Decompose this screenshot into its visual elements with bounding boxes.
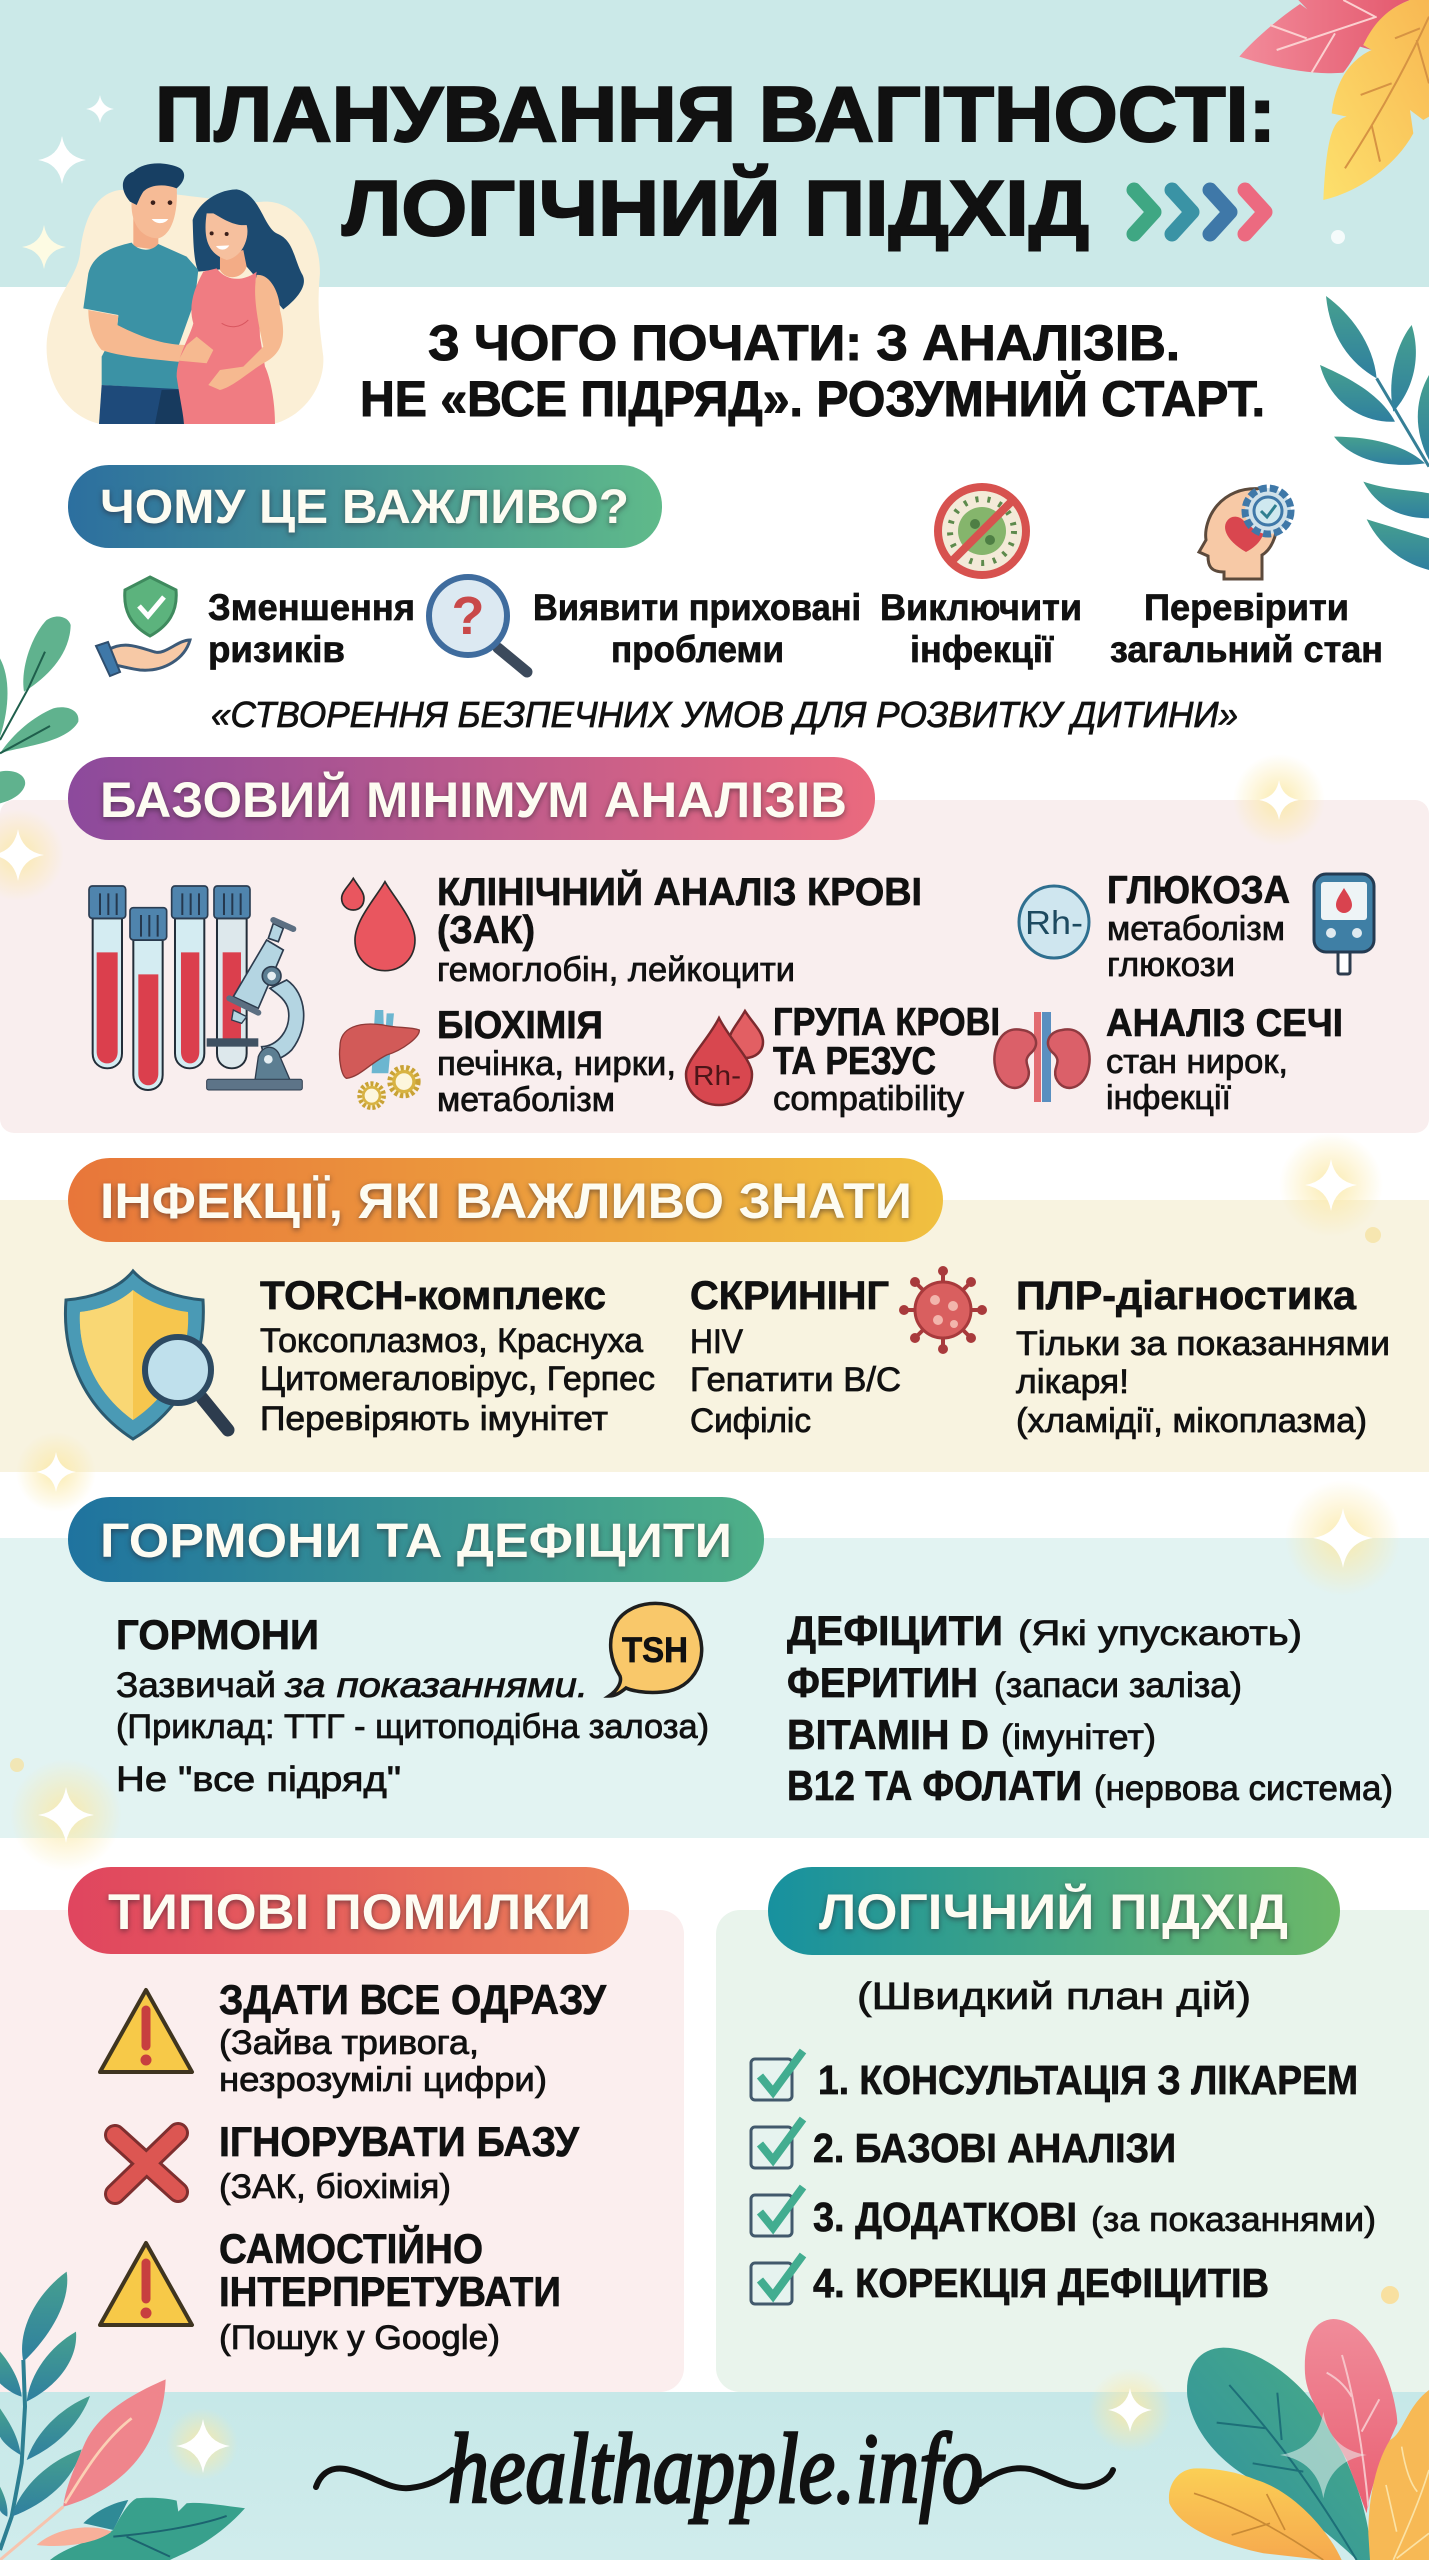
checklist item 3: [751, 2187, 1376, 2240]
text: complete blood count: гемоглобін, лейкоцити: [437, 951, 795, 989]
text: hormones: Зазвичай: [116, 1666, 276, 1705]
icon: Rh blood drops: Rh-: [693, 1060, 741, 1091]
text: PCR diagnostics: ПЛР-діагностика: [1016, 1274, 1357, 1318]
heading pill: basic tests: БАЗОВИЙ МІНІМУМ АНАЛІЗІВ: [100, 771, 847, 828]
heading pill: hormones and deficits: ГОРМОНИ ТА ДЕФІЦИТИ: [100, 1515, 732, 1568]
text: screening: [690, 1274, 901, 1440]
title: ПЛАНУВАННЯ ВАГІТНОСТІ:: [155, 70, 1276, 158]
text: screening: Гепатити В/С: [690, 1361, 901, 1399]
text: hormones: (Приклад: ТТГ - щитоподібна залоза): [116, 1708, 709, 1746]
footer logo: healthapple.info: healthapple.info: [448, 2413, 983, 2524]
heading pill: hormones and deficits: [68, 1497, 764, 1582]
icon: blood drops: [342, 878, 415, 971]
panel: top header band: [0, 0, 1429, 287]
decoration: bottom right leaves: [1169, 2319, 1429, 2560]
decoration: left green leaves: [0, 616, 78, 803]
icon: shield over hand: [96, 577, 190, 676]
text: exclude infections: Виключити: [880, 587, 1082, 628]
text: hormones: ГОРМОНИ: [116, 1611, 319, 1658]
icon: warning triangle 1: [100, 1990, 192, 2072]
panel: logical approach background: [716, 1910, 1429, 2392]
text: PCR diagnostics: Тільки за показаннями: [1016, 1325, 1390, 1363]
text: deficits: (Які упускають): [1018, 1614, 1302, 1653]
heading pill: infections: ІНФЕКЦІЇ, ЯКІ ВАЖЛИВО ЗНАТИ: [100, 1173, 912, 1229]
text: test everything at once: ЗДАТИ ВСЕ ОДРАЗУ: [219, 1976, 607, 2023]
text: test everything at once: (Зайва тривога,: [219, 2024, 479, 2062]
icon: magnifier with question mark: ?: [452, 586, 484, 646]
heading pill: why it matters: [68, 465, 662, 548]
text: reveal hidden problems: проблеми: [611, 629, 784, 670]
text: complete blood count: КЛІНІЧНИЙ АНАЛІЗ КРОВІ: [437, 869, 922, 914]
text: check overall state: загальний стан: [1110, 629, 1383, 670]
icon: crossed out virus: [938, 487, 1026, 575]
text: biochemistry: метаболізм: [437, 1081, 615, 1119]
section: common mistakes: [68, 1867, 629, 2357]
icon: shield with magnifier: [65, 1271, 228, 1439]
icon: Rh badge: [1019, 886, 1089, 958]
text: TORCH complex: TORCH-комплекс: [260, 1274, 606, 1318]
checklist item 3: 3. ДОДАТКОВІ: [813, 2194, 1077, 2240]
text: test everything at once: [219, 1976, 607, 2099]
text: self interpretation: [219, 2224, 561, 2357]
decoration: bottom left leaves: [0, 2272, 245, 2560]
panel: infections background: [0, 1200, 1429, 1472]
text: blood group and Rh: ТА РЕЗУС: [773, 1040, 936, 1083]
icon: chevron arrows: [1134, 190, 1265, 234]
section: hormones and deficits: [68, 1497, 1393, 1809]
text: ignore the basics: [219, 2118, 580, 2206]
panel: footer band: [0, 2392, 1429, 2560]
text: check overall state: Перевірити: [1144, 587, 1349, 628]
heading pill: common mistakes: [68, 1867, 629, 1954]
text: biochemistry: БІОХІМІЯ: [437, 1004, 603, 1047]
icon: Rh badge: Rh-: [1025, 904, 1083, 941]
text: TORCH complex: [260, 1274, 655, 1438]
checklist item 2: 2. БАЗОВІ АНАЛІЗИ: [813, 2125, 1176, 2171]
text: complete blood count: [437, 869, 922, 989]
heading pill: basic tests: [68, 757, 875, 840]
text: hormones: Не "все підряд": [116, 1760, 401, 1799]
subtitle: З ЧОГО ПОЧАТИ: З АНАЛІЗІВ.: [428, 315, 1180, 371]
text: glucose: глюкози: [1107, 946, 1235, 984]
text: urine test: інфекції: [1106, 1079, 1232, 1117]
text: urine test: [1106, 1002, 1343, 1117]
text: reveal hidden problems: [533, 587, 861, 670]
illustration: test tubes and microscope: [89, 878, 419, 1108]
decoration: top right leaves: [1239, 0, 1429, 200]
icon: red cross: [115, 2133, 178, 2194]
text: check overall state: [1110, 587, 1383, 670]
text: self interpretation: САМОСТІЙНО: [219, 2224, 483, 2272]
section: logical approach: [751, 1867, 1376, 2306]
text: TORCH complex: Токсоплазмоз, Краснуха: [260, 1322, 643, 1360]
text: screening: HIV: [690, 1323, 743, 1361]
panel: hormones background: [0, 1538, 1429, 1838]
text: deficits: ВІТАМІН D: [787, 1711, 989, 1758]
text: hormones: [116, 1611, 709, 1799]
text: glucose: [1107, 869, 1290, 984]
text: glucose: ГЛЮКОЗА: [1107, 869, 1290, 912]
text: test everything at once: незрозумілі цифри): [219, 2061, 547, 2099]
panel: basic tests background: [0, 800, 1429, 1133]
icon: liver and gears: [340, 1010, 419, 1108]
text: blood group and Rh: [773, 1001, 1000, 1118]
panel: common mistakes background: [0, 1910, 684, 2392]
title: [155, 70, 1276, 252]
icon: kidneys: [994, 1012, 1090, 1102]
text: screening: Сифіліс: [690, 1402, 811, 1440]
text: deficits: (нервова система): [1094, 1769, 1393, 1808]
icon: Rh blood drops: [686, 1011, 763, 1105]
text: deficits: ДЕФІЦИТИ: [787, 1607, 1003, 1654]
icon: virus: [899, 1266, 987, 1354]
text: exclude infections: [880, 587, 1082, 670]
checklist item 3: (за показаннями): [1091, 2201, 1376, 2239]
text: urine test: стан нирок,: [1106, 1043, 1288, 1081]
subtitle: НЕ «ВСЕ ПІДРЯД». РОЗУМНИЙ СТАРТ.: [360, 370, 1265, 427]
heading pill: infections: [68, 1158, 943, 1242]
title: ЛОГІЧНИЙ ПІДХІД: [342, 164, 1089, 252]
subtitle: [360, 315, 1265, 427]
text: deficits: (запаси заліза): [994, 1666, 1242, 1705]
text: glucose: метаболізм: [1107, 910, 1285, 948]
icon: warning triangle 2: [100, 2243, 192, 2325]
checklist item 1: 1. КОНСУЛЬТАЦІЯ З ЛІКАРЕМ: [818, 2057, 1358, 2103]
text: screening: СКРИНІНГ: [690, 1274, 889, 1318]
checklist item 4: 4. КОРЕКЦІЯ ДЕФІЦИТІВ: [813, 2260, 1269, 2306]
text: ignore the basics: ІГНОРУВАТИ БАЗУ: [219, 2118, 580, 2165]
section: basic tests: [68, 757, 1374, 1119]
text: quick action plan: (Швидкий план дій): [857, 1976, 1251, 2018]
quote: «СТВОРЕННЯ БЕЗПЕЧНИХ УМОВ ДЛЯ РОЗВИТКУ ДИТИНИ»: [211, 694, 1238, 735]
text: blood group and Rh: ГРУПА КРОВІ: [773, 1001, 1000, 1044]
text: deficits: (імунітет): [1001, 1718, 1156, 1757]
text: urine test: АНАЛІЗ СЕЧІ: [1106, 1002, 1343, 1045]
text: self interpretation: (Пошук у Google): [219, 2319, 500, 2357]
illustration: couple: [47, 163, 323, 424]
text: PCR diagnostics: (хламідії, мікоплазма): [1016, 1402, 1367, 1440]
icon: magnifier with question mark: [429, 577, 527, 672]
text: reveal hidden problems: Виявити приховані: [533, 587, 861, 628]
icon: TSH speech bubble: TSH: [622, 1631, 688, 1670]
text: reduce risks: ризиків: [208, 629, 345, 670]
text: TORCH complex: Цитомегаловірус, Герпес: [260, 1360, 655, 1398]
heading pill: common mistakes: ТИПОВІ ПОМИЛКИ: [108, 1884, 591, 1940]
text: TORCH complex: Перевіряють імунітет: [260, 1400, 608, 1438]
text: hormones: за показаннями.: [284, 1666, 588, 1705]
section: why it matters: [68, 465, 1383, 735]
icon: head with heart and gear: [1199, 488, 1291, 579]
text: deficits: В12 ТА ФОЛАТИ: [787, 1762, 1082, 1809]
section: infections: [65, 1158, 1390, 1440]
text: reduce risks: Зменшення: [208, 587, 415, 628]
icon: TSH speech bubble: [609, 1603, 702, 1696]
text: self interpretation: ІНТЕРПРЕТУВАТИ: [219, 2268, 561, 2315]
text: biochemistry: [437, 1004, 676, 1119]
icon: glucometer: [1314, 874, 1374, 974]
text: PCR diagnostics: лікаря!: [1016, 1363, 1129, 1401]
heading pill: why it matters: ЧОМУ ЦЕ ВАЖЛИВО?: [100, 481, 629, 534]
text: PCR diagnostics: [1016, 1274, 1390, 1440]
text: exclude infections: інфекції: [910, 629, 1055, 670]
text: reduce risks: [208, 587, 415, 670]
heading pill: logical approach: [768, 1867, 1340, 1955]
heading pill: logical approach: ЛОГІЧНИЙ ПІДХІД: [819, 1883, 1288, 1940]
text: ignore the basics: (ЗАК, біохімія): [219, 2168, 451, 2206]
text: biochemistry: печінка, нирки,: [437, 1045, 676, 1083]
text: complete blood count: (ЗАК): [437, 909, 535, 952]
text: deficits: [787, 1607, 1393, 1809]
text: deficits: ФЕРИТИН: [787, 1659, 978, 1706]
text: blood group and Rh: compatibility: [773, 1080, 964, 1118]
decoration: right teal leaves: [1320, 296, 1429, 570]
